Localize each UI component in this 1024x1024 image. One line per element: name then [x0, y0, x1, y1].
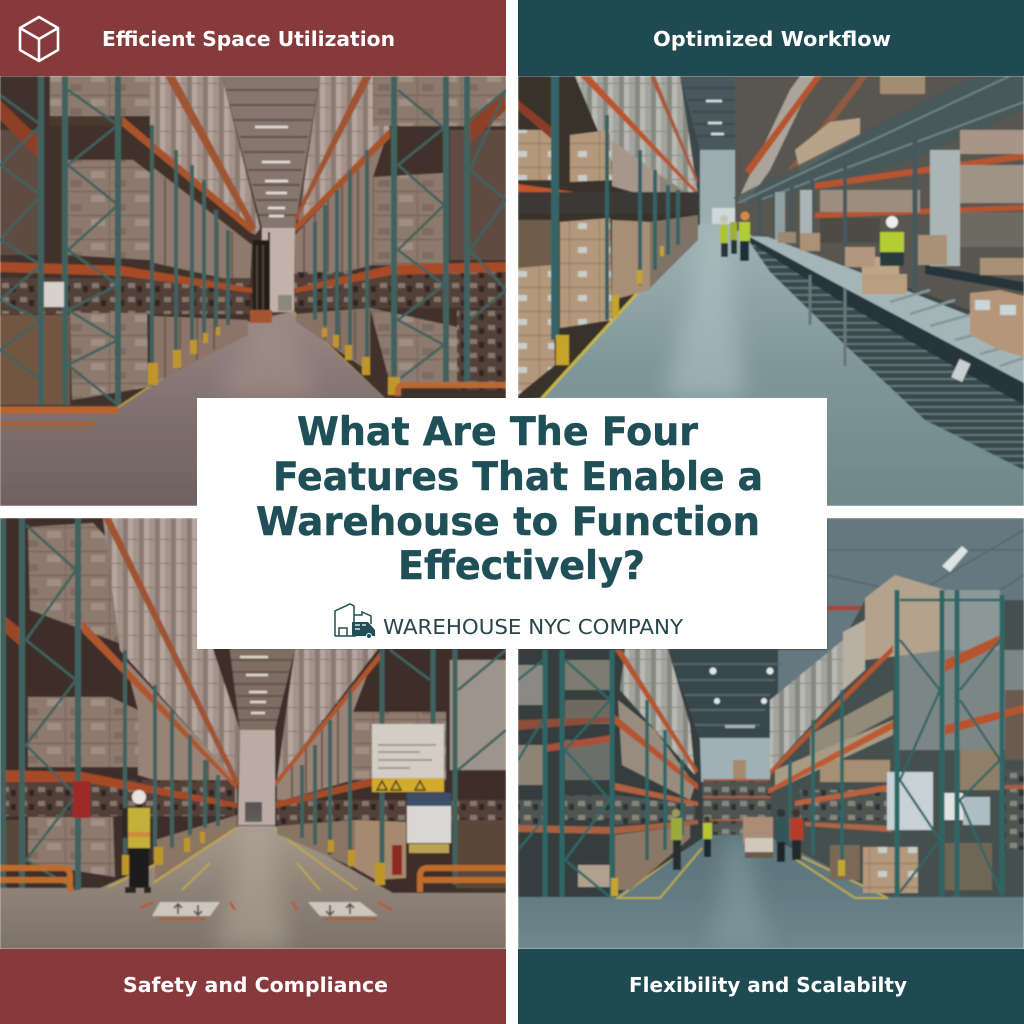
posted sign	[407, 793, 451, 853]
safety signboard	[372, 724, 444, 792]
footer band: flexibility and scalability	[518, 949, 1024, 1024]
header band: efficient space utilization	[0, 0, 506, 76]
left rack, beams	[165, 76, 256, 232]
forklift	[250, 232, 272, 323]
left barrier	[0, 868, 70, 892]
icon: cube	[20, 17, 58, 61]
photo: conveyor aisle with workers	[518, 76, 1024, 506]
staff on floor	[671, 809, 803, 870]
fire cabinet	[73, 781, 90, 818]
panel: safety and compliance	[0, 518, 506, 949]
photo: warehouse aisle with forklift	[0, 76, 506, 506]
panel: optimized workflow	[518, 76, 1024, 506]
title: Effectively?	[398, 544, 645, 589]
heading: safety and compliance: Safety and Compliance	[123, 973, 388, 997]
right barrier	[420, 868, 506, 892]
left rack	[518, 649, 703, 897]
centre pallet	[743, 817, 773, 858]
right rack, uprights	[315, 76, 506, 385]
header band: optimized workflow	[518, 0, 1024, 76]
title: Warehouse to Function	[256, 500, 760, 545]
conveyor	[748, 236, 1024, 470]
floor markings	[140, 902, 392, 919]
posted panels	[887, 772, 990, 830]
footer band: safety and compliance	[0, 949, 506, 1024]
right rack	[770, 600, 1024, 897]
heading: efficient space utilization: Efficient Space Utilization	[102, 27, 395, 51]
right rack and mezzanine	[735, 76, 1024, 330]
right rack, beams	[294, 76, 372, 222]
workers	[720, 212, 904, 266]
photo: aisle with safety signs	[0, 518, 506, 949]
photo: storage aisle with staff	[518, 518, 1024, 949]
worker in safety vest	[122, 790, 151, 893]
title: What Are The Four	[297, 410, 699, 455]
left rack	[0, 518, 240, 888]
left rack, loads	[242, 208, 259, 319]
right rack	[276, 659, 425, 892]
central title card	[197, 398, 827, 649]
panel: flexibility and scalability	[518, 518, 1024, 949]
company name: WAREHOUSE NYC COMPANY	[383, 615, 684, 639]
icon: warehouse and truck logo	[335, 604, 375, 638]
title	[256, 410, 763, 589]
right rack, loads	[293, 236, 506, 398]
roof	[777, 518, 1024, 694]
left rack	[518, 76, 700, 398]
heading: optimized workflow: Optimized Workflow	[653, 27, 891, 51]
panel: efficient space utilization	[0, 76, 506, 506]
title: Features That Enable a	[273, 455, 763, 500]
left rack, uprights and bracing	[0, 76, 228, 405]
boxes on conveyor	[778, 232, 1024, 357]
heading: flexibility and scalability: Flexibility and Scalabilty	[629, 973, 907, 997]
